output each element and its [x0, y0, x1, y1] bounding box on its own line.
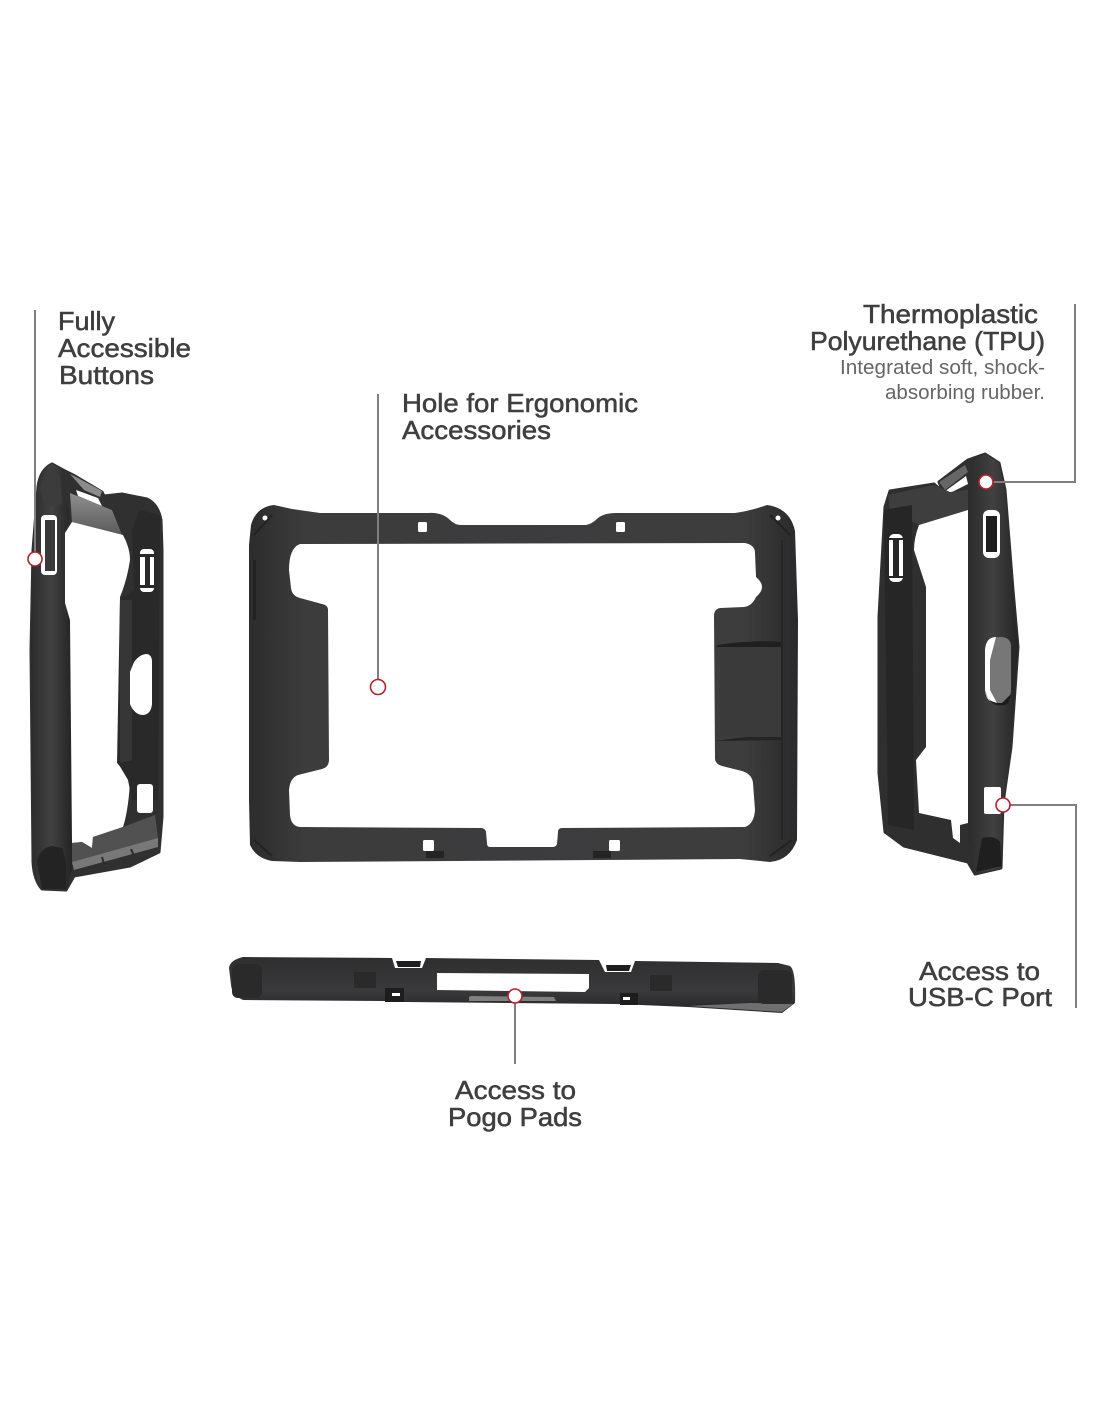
- label: hole for ergonomic accessories: [402, 388, 638, 445]
- leader line: TPU: [994, 304, 1075, 482]
- label: fully accessible buttons: Buttons: [59, 360, 154, 390]
- label: access to pogo pads: Access to: [455, 1075, 576, 1105]
- marker: ergonomic hole: [370, 680, 386, 694]
- white slots, left view: [41, 515, 57, 575]
- window: [437, 973, 589, 992]
- label: access to USB-C port: Access to: [919, 956, 1040, 986]
- pogo pad strip: [469, 996, 556, 1001]
- marker: USB-C: [996, 798, 1010, 812]
- white slots, right view: [983, 510, 1000, 558]
- tab slots, front view: [418, 522, 427, 532]
- label: access to pogo pads: [448, 1075, 582, 1132]
- hole of right view: [914, 510, 968, 843]
- product view: left side of case: [31, 464, 162, 890]
- product view: bottom of case: [229, 957, 795, 1013]
- label: thermoplastic polyurethane: [810, 299, 1045, 404]
- label: thermoplastic polyurethane: Thermoplastic: [863, 299, 1038, 329]
- label: thermoplastic polyurethane: absorbing rubber.: [885, 382, 1045, 404]
- label: access to USB-C port: [908, 956, 1053, 1012]
- leader line: USB-C: [1008, 805, 1076, 1008]
- marker: buttons: [28, 552, 42, 566]
- leader line: fully accessible buttons: [34, 310, 36, 552]
- leader line: pogo pads: [514, 1003, 516, 1064]
- label: fully accessible buttons: [58, 306, 191, 390]
- leader line: ergonomic hole: [377, 394, 379, 680]
- label: access to pogo pads: Pogo Pads: [448, 1102, 582, 1132]
- product view: front of case: [249, 505, 798, 862]
- product view: right side of case: [879, 454, 1018, 874]
- label: thermoplastic polyurethane: Integrated soft, shock-: [840, 357, 1045, 379]
- label: fully accessible buttons: Accessible: [58, 333, 191, 363]
- marker: TPU: [979, 475, 993, 489]
- label: hole for ergonomic accessories: Accessories: [402, 415, 551, 445]
- label: access to USB-C port: USB-C Port: [908, 982, 1053, 1012]
- marker: pogo pads: [508, 989, 522, 1003]
- label: hole for ergonomic accessories: Hole for Ergonomic: [402, 388, 638, 418]
- label: fully accessible buttons: Fully: [58, 306, 115, 336]
- hole of left view: [65, 522, 130, 848]
- label: thermoplastic polyurethane: Polyurethane (TPU): [810, 326, 1045, 356]
